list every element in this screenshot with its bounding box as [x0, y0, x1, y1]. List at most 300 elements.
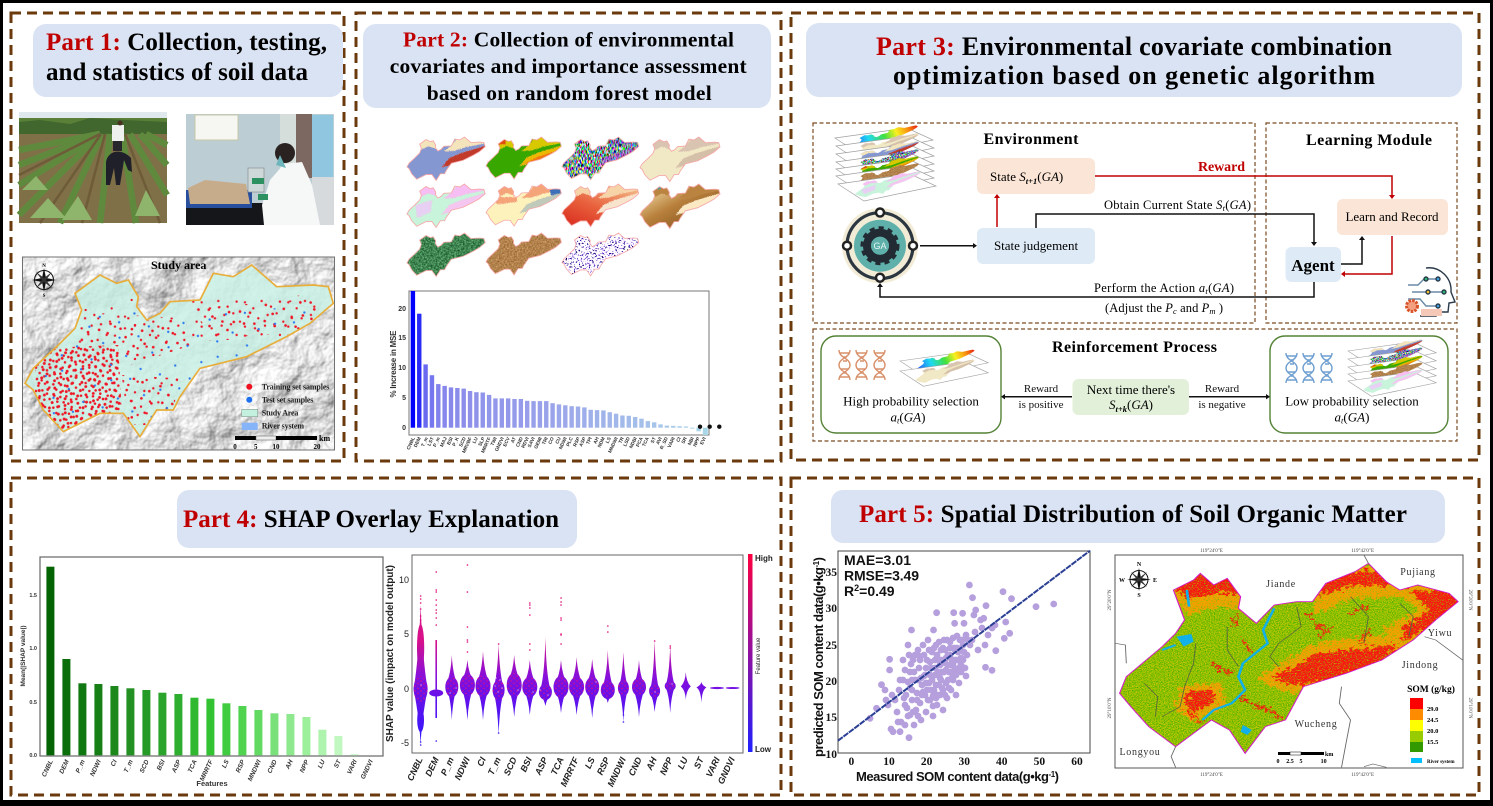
place names: Yiwu: [1428, 628, 1452, 639]
reinforcement process box: [813, 329, 1457, 441]
x axis labels: GNDVI: [716, 755, 737, 786]
place names: Wucheng: [1295, 719, 1337, 730]
x axis labels: MRRTF: [480, 436, 493, 454]
x axis title: -1: [1049, 770, 1056, 779]
x axis labels: DEM: [423, 755, 441, 778]
graticule labels: 119°24'0"E: [1200, 549, 1223, 554]
x axis labels: SLP: [477, 436, 487, 447]
arrow: obtain current state: [1036, 214, 1317, 246]
x axis labels: GNDVI: [494, 436, 506, 453]
x axis labels: TPI: [585, 436, 594, 446]
x axis labels: ASP: [170, 758, 183, 775]
x axis labels: DEM: [58, 758, 71, 775]
x axis labels: SR: [681, 436, 689, 445]
state t+1 box: [977, 158, 1095, 194]
compass: N: [42, 264, 46, 269]
obtain current state label: Obtain Current State S: [1104, 198, 1222, 212]
reward label: Reward: [1198, 160, 1245, 175]
x axis title: Measured SOM content data(g•kg: [856, 769, 1049, 784]
mean SHAP bar chart: [20, 557, 383, 788]
x axis labels: TCA: [549, 756, 566, 777]
arrow: learn back to agent: [1341, 236, 1392, 277]
arrow: judgement to state t+1: [994, 194, 1000, 227]
scale bar: [1276, 752, 1333, 765]
metrics: R: [844, 583, 854, 599]
x axis labels: CI: [675, 436, 683, 443]
metrics: RMSE=3.49: [844, 568, 919, 584]
x axis labels: CO: [547, 436, 556, 445]
panel: part 3 genetic algorithm optimisation: [791, 13, 1479, 460]
colour bar: [748, 554, 773, 754]
x axis labels: NDBI: [628, 436, 639, 449]
y axis title: -1: [812, 560, 821, 567]
adjust label: ): [1216, 301, 1223, 315]
x axis labels: GNDVI: [360, 759, 375, 781]
x axis labels: ASP: [533, 755, 550, 778]
compass: [1119, 562, 1157, 599]
arrow: reward negative: Reward: [1205, 383, 1240, 395]
icon: AI head: [1406, 268, 1455, 316]
part 2 heading: [363, 24, 771, 108]
x axis labels: VARI: [704, 755, 722, 779]
environment box: [813, 123, 1255, 323]
compass: S: [1137, 593, 1141, 599]
agent box: [1286, 247, 1341, 282]
rivers and lakes: [1162, 590, 1274, 733]
graticule labels: 119°42'0"E: [1351, 549, 1374, 554]
part 4 heading: [177, 490, 577, 548]
next time box: t+k: [1116, 404, 1128, 414]
x axis labels: LS: [583, 756, 597, 770]
x axis labels: P_K: [451, 436, 461, 447]
y axis ticks: 10: [826, 749, 837, 761]
y axis ticks: [826, 567, 837, 761]
x axis labels: NPP: [299, 758, 311, 774]
SOM legend: 24.5: [1427, 717, 1439, 724]
y axis labels: [399, 575, 409, 748]
x axis labels: MRVBF: [461, 436, 474, 454]
y axis labels: 15: [398, 335, 406, 342]
x axis labels: LU: [317, 759, 327, 770]
x axis labels: CNBL: [41, 759, 55, 778]
study area region: [25, 265, 333, 437]
y axis title: SHAP value (impact on model output): [385, 565, 396, 742]
x axis labels: AT: [510, 436, 518, 444]
x axis labels: LS: [605, 436, 613, 444]
metrics: 2: [854, 583, 859, 593]
x axis labels: RSP: [595, 755, 612, 777]
fit line: [838, 551, 1090, 741]
place names: Jiande: [1266, 579, 1296, 590]
part 2 heading: Part 2: Collection of environmental: [403, 28, 734, 52]
two layer map stack: [900, 348, 988, 386]
x axis labels: AH: [284, 759, 295, 771]
agent box: Agent: [1291, 256, 1335, 275]
x axis labels: MNDWI: [247, 759, 263, 782]
x axis labels: TR: [618, 436, 626, 445]
part 1 heading: and statistics of soil data: [46, 59, 308, 86]
high probability box: GA): [904, 410, 925, 425]
x axis labels: CND: [627, 755, 644, 778]
graticule labels: 119°42'0"E: [1351, 773, 1374, 778]
colour bar: High: [755, 554, 773, 563]
learning module box: Learning Module: [1306, 132, 1432, 149]
low probability box: a: [1335, 410, 1342, 425]
graticule labels: 29°10'0"N: [1108, 697, 1113, 719]
x axis labels: SCD: [458, 436, 468, 448]
x axis labels: ASP: [578, 436, 588, 448]
perform action label: (: [1208, 281, 1212, 295]
scale bar: km: [1325, 752, 1333, 758]
compass: S: [43, 294, 46, 299]
arrow: reward negative: is negative: [1198, 399, 1246, 411]
y axis labels: 0: [402, 425, 406, 432]
panel: part 5 spatial distribution: [791, 478, 1479, 795]
colour bar: Low: [755, 745, 772, 754]
x axis labels: ST: [692, 754, 706, 770]
x axis ticks: 20: [921, 756, 933, 768]
scale bar: 2.5: [1286, 759, 1294, 765]
x axis labels: TWI: [490, 436, 499, 447]
legend: River system: [262, 422, 304, 430]
y axis labels: 20: [398, 306, 406, 313]
y axis labels: 10: [398, 365, 406, 372]
next time box: [1072, 379, 1189, 415]
x axis labels: T_m: [486, 756, 503, 777]
SOM legend: River system: [1427, 760, 1455, 765]
arrow: reward positive: [1001, 383, 1072, 411]
mean SHAP bar chart: Features: [196, 779, 228, 788]
compass: N: [1137, 562, 1142, 568]
x axis labels: MRRTF: [199, 758, 215, 782]
y axis labels: [389, 306, 406, 432]
colour bar: Feature value: [756, 637, 762, 674]
panel: part 4 SHAP: [11, 478, 781, 795]
perform action label: GA): [1213, 281, 1234, 295]
arrow: reward negative: [1189, 383, 1270, 411]
low probability box: (: [1343, 410, 1348, 425]
x axis labels: CND: [515, 436, 525, 448]
y axis ticks: 35: [826, 567, 837, 579]
x axis labels: LST: [427, 436, 436, 447]
violins: [414, 605, 740, 745]
SOM legend: 20.0: [1427, 728, 1438, 735]
five layer map stack: [1348, 338, 1436, 396]
obtain current state label: t: [1223, 203, 1226, 213]
photo: field soil sampling: [19, 112, 167, 223]
SOM raster: [1115, 555, 1463, 767]
y axis labels: 0.0: [29, 753, 37, 759]
scatter plot: [811, 551, 1090, 784]
SOM legend: 15.5: [1427, 739, 1439, 746]
state judgement box: [977, 228, 1095, 264]
x axis labels: CI: [475, 755, 488, 768]
x axis labels: AH: [644, 755, 659, 773]
arrow: reward positive: is positive: [1019, 399, 1064, 411]
state t+1 box: (: [1037, 169, 1042, 184]
x axis labels: LU: [472, 436, 480, 445]
state t+1 box: GA): [1042, 169, 1063, 184]
x axis ticks: 0: [849, 756, 855, 768]
x axis labels: CND: [267, 759, 279, 775]
learning module box: [1266, 123, 1457, 323]
map: study area with sample points: [22, 257, 334, 451]
arrow: reward to learn and record: [1095, 176, 1395, 199]
x axis labels: AVI: [655, 436, 664, 446]
x axis labels: NPP: [658, 755, 675, 777]
y axis labels: % Increase in MSE: [389, 330, 398, 398]
legend: Training set samples: [262, 382, 329, 392]
legend: [242, 382, 329, 430]
scale bar: 5: [254, 443, 258, 451]
x axis labels: MRRTF: [559, 755, 581, 788]
x axis labels: NDWI: [558, 436, 569, 450]
high probability box: (: [899, 410, 904, 425]
y axis ticks: 30: [826, 603, 837, 615]
x axis labels: CNBL: [405, 756, 425, 783]
next time box: Next time there's: [1087, 382, 1175, 397]
low probability box: t: [1341, 416, 1344, 426]
y axis ticks: 15: [826, 712, 837, 724]
covariate layer stack: [835, 123, 936, 201]
low probability box: [1270, 336, 1448, 433]
x axis labels: P_m: [439, 756, 456, 777]
y axis title: predicted SOM content data(g•kg: [811, 567, 826, 757]
scale bar: 5: [1300, 759, 1302, 765]
adjust label: c: [1173, 306, 1177, 316]
x axis labels: VARI: [667, 436, 677, 449]
x axis labels: SAVI: [527, 436, 537, 449]
x axis labels: PCA: [635, 436, 645, 448]
x axis ticks: 40: [996, 756, 1008, 768]
x axis labels: NDWI: [453, 755, 472, 782]
x axis labels: MAJ: [439, 436, 449, 448]
high probability box: t: [897, 416, 900, 426]
scale bar: 0: [1276, 759, 1280, 765]
metrics: [844, 552, 919, 599]
place names: Jindong: [1402, 660, 1438, 671]
place names: [1119, 567, 1452, 758]
high probability box: [821, 336, 1001, 433]
y axis labels: 10: [399, 575, 409, 585]
adjust label: and: [1177, 301, 1202, 315]
environment box: Environment: [984, 131, 1079, 148]
x axis labels: SCD: [502, 755, 519, 777]
y axis labels: 1.0: [29, 646, 37, 652]
scatter points: [870, 585, 1054, 738]
panel: part 1 soil data: [11, 13, 344, 461]
x axis labels: TRI: [541, 436, 550, 446]
y axis labels: 0: [404, 684, 409, 694]
x axis labels: NPP: [692, 436, 702, 448]
perform action label: t: [1205, 286, 1208, 296]
graticule labels: 29°10'0"N: [1467, 697, 1472, 719]
arrow: perform action: [877, 282, 1314, 297]
x axis labels: EVI: [699, 436, 708, 446]
SHAP beeswarm chart: [385, 554, 773, 788]
y axis labels: [20, 593, 37, 759]
x axis labels: DEM: [413, 436, 423, 449]
x axis labels: RSP: [572, 436, 582, 448]
part 3 heading: [806, 23, 1462, 97]
x axis labels: LU: [676, 755, 690, 771]
low probability box: GA): [1348, 410, 1369, 425]
graticule labels: 119°24'0"E: [1200, 773, 1223, 778]
adjust label: P: [1201, 301, 1210, 315]
x axis labels: LS: [221, 758, 231, 769]
x axis ticks: [849, 756, 1083, 768]
adjust label: m: [1209, 306, 1216, 316]
SOM legend: SOM (g/kg): [1407, 684, 1455, 695]
x axis title: ): [1055, 769, 1059, 784]
x axis ticks: 10: [883, 756, 895, 768]
compass: [32, 264, 56, 299]
x axis labels: CNBL: [406, 436, 417, 451]
next time box: S: [1109, 397, 1116, 412]
scale bar: 20: [314, 443, 321, 451]
learn and record box: [1337, 199, 1448, 235]
arrow: GA to judgement: [920, 243, 977, 248]
part 1 heading: [33, 24, 343, 97]
part 5 heading: Part 5: Spatial Distribution of Soil Organic Matter: [859, 501, 1407, 528]
y axis ticks: 25: [826, 640, 837, 652]
x axis labels: VARI: [346, 759, 359, 775]
arrow: agent to learn: [1341, 236, 1365, 264]
place names: Pujiang: [1400, 567, 1436, 578]
metrics: MAE=3.01: [844, 552, 911, 568]
x axis ticks: 60: [1071, 756, 1083, 768]
SOM legend: [1407, 684, 1455, 765]
x axis labels: NDWI: [89, 759, 103, 778]
x axis labels: GEMI: [533, 436, 544, 450]
place names: Longyou: [1119, 747, 1161, 758]
scale bar: 0: [233, 443, 237, 451]
y axis labels: 5: [404, 629, 409, 639]
part 2 heading: based on random forest model: [427, 81, 712, 105]
learn and record box: Learn and Record: [1345, 209, 1439, 224]
x axis labels: [406, 436, 708, 454]
white flecks: [421, 678, 672, 695]
adjust label: (Adjust the P: [1105, 301, 1173, 315]
panel: part 2 covariates: [356, 13, 781, 461]
x axis labels: [41, 758, 375, 782]
x axis labels: BSI: [518, 755, 534, 773]
random forest importance bar chart: [389, 291, 722, 454]
state t+1 box: t+1: [1026, 176, 1037, 186]
x axis labels: MNDWI: [605, 755, 628, 788]
graticule labels: 29°20'0"N: [1467, 589, 1472, 611]
obtain current state label: GA): [1230, 198, 1251, 212]
part 1 heading: Part 1: Collection, testing,: [46, 29, 327, 56]
x axis labels: CI: [110, 759, 119, 768]
icon: orange DNA: [839, 350, 885, 380]
SOM spatial map: [1108, 549, 1472, 778]
graticule labels: [1108, 549, 1472, 778]
part 2 heading: covariates and importance assessment: [390, 54, 748, 78]
state judgement box: State judgement: [994, 238, 1078, 253]
x axis labels: MNDWI: [607, 436, 620, 454]
y axis labels: 1.5: [29, 593, 37, 599]
part 5 heading: [831, 490, 1445, 543]
x axis labels: BSI: [446, 436, 455, 446]
x axis labels: PLC: [565, 436, 575, 448]
x axis labels: NBI: [687, 436, 696, 446]
y axis labels: Mean(|SHAP value|): [20, 626, 27, 686]
county lines: [1144, 597, 1413, 717]
x axis labels: P_m: [432, 436, 442, 448]
compass: W: [1119, 578, 1125, 584]
outlier points: [421, 565, 670, 652]
part 4 heading: Part 4: SHAP Overlay Explanation: [183, 506, 559, 533]
x axis labels: ST: [650, 436, 658, 444]
perform action label: Perform the Action a: [1094, 281, 1205, 295]
x axis labels: TCA: [187, 759, 199, 774]
arrow: reward positive: Reward: [1024, 383, 1059, 395]
high probability box: High probability selection: [843, 394, 979, 409]
obtain current state label: (: [1225, 198, 1229, 212]
next time box: (: [1127, 397, 1131, 412]
x axis labels: R_SD: [659, 436, 670, 450]
map title: Study area: [151, 258, 206, 272]
x axis labels: RSP: [235, 758, 247, 774]
scale bar: 10: [272, 443, 280, 451]
icon: blue DNA: [1286, 353, 1332, 383]
scale bar: 10: [1321, 759, 1327, 765]
reinforcement process box: Reinforcement Process: [1052, 339, 1217, 356]
x axis labels: T_m: [420, 436, 430, 448]
y axis labels: 0.5: [29, 700, 37, 706]
y axis labels: 5: [402, 395, 406, 402]
x axis ticks: 50: [1034, 756, 1045, 768]
x axis labels: ST: [333, 758, 343, 769]
legend: Test set samples: [262, 396, 313, 404]
y axis labels: -5: [401, 738, 409, 748]
x axis labels: CU: [554, 436, 563, 445]
next time box: GA): [1131, 397, 1153, 412]
x axis labels: ECV: [502, 436, 512, 448]
x axis ticks: 30: [958, 756, 970, 768]
part 3 heading: optimization based on genetic algorithm: [893, 61, 1375, 90]
part 3 heading: Part 3: Environmental covariate combination: [876, 32, 1393, 61]
x axis labels: BSI: [156, 759, 167, 772]
covariate map grid: [407, 137, 720, 277]
x axis labels: SCD: [139, 759, 151, 774]
compass: E: [1153, 578, 1157, 584]
x axis labels: AH: [592, 436, 601, 445]
x axis labels: P_m: [75, 759, 87, 774]
high probability box: a: [891, 410, 898, 425]
SOM legend: 29.0: [1427, 706, 1438, 713]
genetic algorithm gear icon: GA: [873, 241, 887, 251]
legend: Study Area: [262, 408, 298, 418]
x axis labels: RDVI: [521, 436, 531, 449]
genetic algorithm gear icon: [842, 208, 918, 283]
state t+1 box: State S: [990, 169, 1026, 184]
y axis ticks: 20: [826, 676, 837, 688]
graticule labels: 29°20'0"N: [1108, 589, 1113, 611]
x axis labels: LSD: [622, 436, 632, 448]
scale bar: [233, 434, 330, 451]
x axis labels: TCA: [641, 436, 651, 448]
x axis labels: NDM: [597, 436, 607, 449]
photo: laboratory testing: [186, 114, 334, 225]
metrics: =0.49: [859, 583, 895, 599]
x axis labels: T_m: [123, 759, 135, 774]
scale bar: km: [319, 434, 330, 443]
magenta speckle in violin bodies: [414, 673, 676, 702]
low probability box: Low probability selection: [1285, 394, 1419, 409]
y axis title: ): [811, 557, 826, 561]
